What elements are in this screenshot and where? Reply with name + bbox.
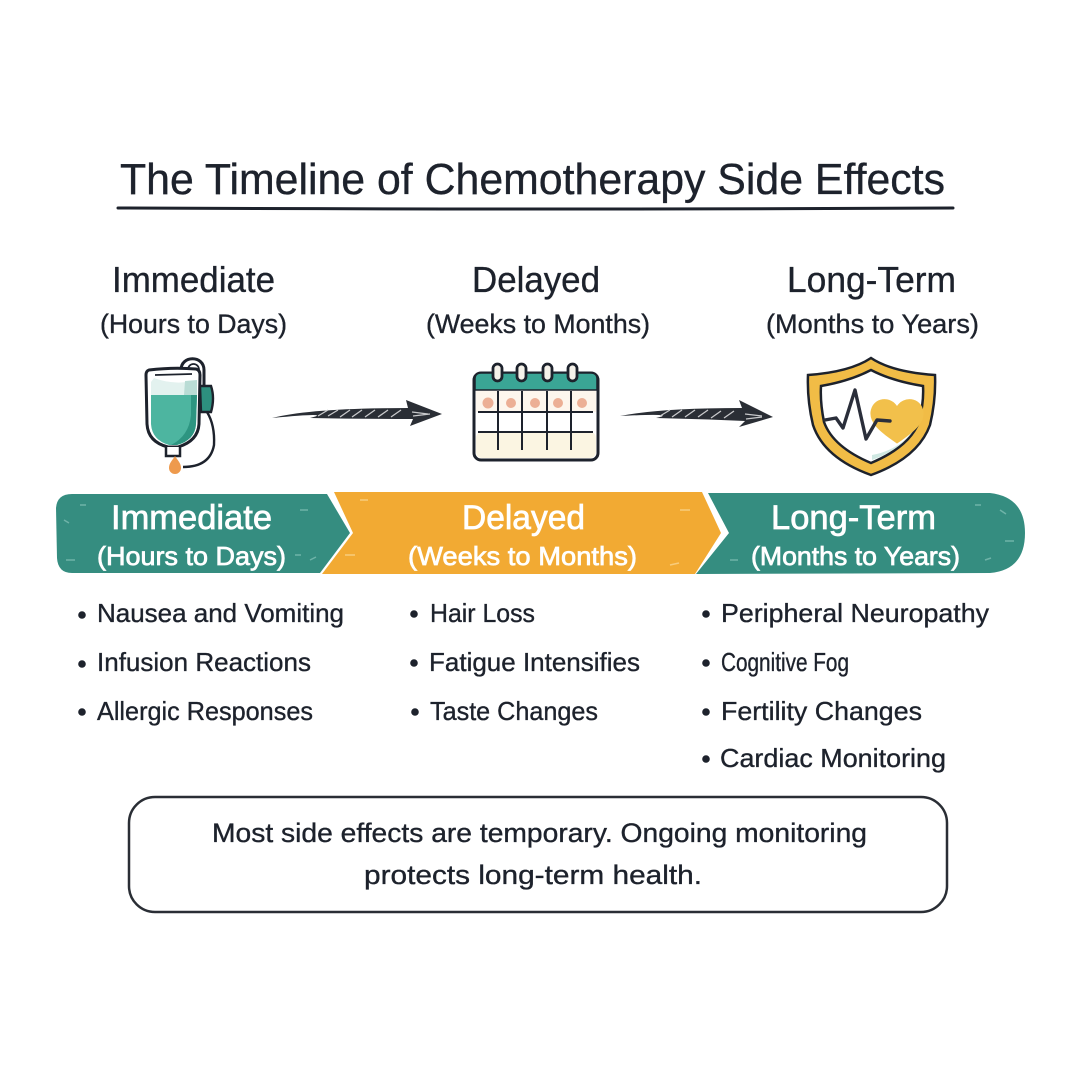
arrow: delayed to long-term [620, 400, 773, 427]
banner segment: long-term: (Months to Years) [751, 541, 960, 571]
banner segment: immediate: (Hours to Days) [97, 541, 286, 571]
icon: calendar [474, 364, 598, 460]
icon: shield with heart [808, 358, 935, 475]
banner segment: immediate: Immediate [111, 499, 272, 537]
list: long-term effects: Fertility Changes [721, 696, 922, 726]
heading: delayed: (Weeks to Months) [426, 309, 650, 339]
arrow: immediate to delayed [272, 400, 442, 426]
banner segment: delayed [322, 492, 721, 574]
list: immediate effects: Allergic Responses [97, 696, 313, 726]
heading: immediate [100, 259, 287, 339]
list: long-term effects: Peripheral Neuropathy [721, 598, 989, 628]
list: long-term effects: Cognitive Fog [721, 647, 849, 677]
banner segment: long-term [696, 493, 1025, 574]
heading: long-term: (Months to Years) [766, 309, 979, 339]
list: delayed effects: Hair Loss [430, 598, 535, 628]
banner segment: long-term: Long-Term [771, 499, 936, 537]
callout: protects long-term health. [364, 860, 702, 890]
list: long-term effects: Cardiac Monitoring [720, 743, 946, 773]
list: immediate effects: Infusion Reactions [97, 647, 311, 677]
list: long-term effects [702, 598, 989, 773]
callout [129, 797, 947, 912]
list: immediate effects: Nausea and Vomiting [97, 598, 344, 628]
list: delayed effects [410, 598, 640, 726]
banner segment: immediate [56, 494, 350, 573]
banner segment: delayed: (Weeks to Months) [408, 541, 637, 571]
heading: long-term: Long-Term [787, 259, 956, 300]
banner segment: delayed: Delayed [462, 499, 585, 537]
title: The Timeline of Chemotherapy Side Effects [120, 155, 945, 204]
list: immediate effects [78, 598, 344, 726]
heading: delayed [426, 259, 650, 339]
timeline banner [56, 492, 1025, 574]
heading: delayed: Delayed [472, 259, 600, 300]
heading: immediate: Immediate [112, 259, 275, 300]
list: delayed effects: Fatigue Intensifies [429, 647, 640, 677]
heading: long-term [766, 259, 979, 339]
icon: IV bag [146, 359, 214, 474]
list: delayed effects: Taste Changes [430, 696, 598, 726]
callout: Most side effects are temporary. Ongoing monitoring [212, 818, 867, 848]
heading: immediate: (Hours to Days) [100, 309, 287, 339]
